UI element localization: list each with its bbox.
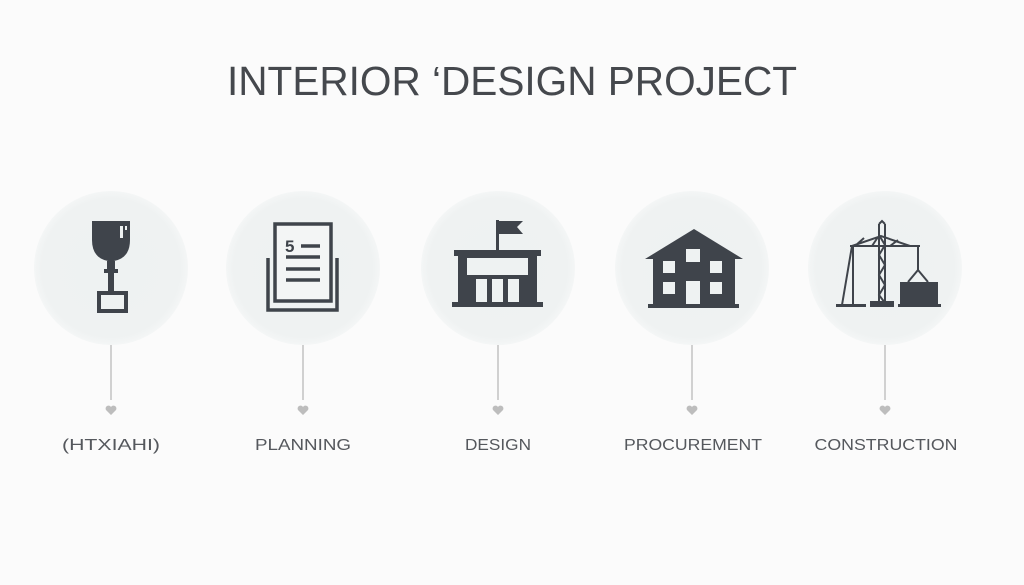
step 4: procurement xyxy=(615,191,769,454)
label 5: CONSTRUCTION xyxy=(814,437,958,454)
title: INTERIOR ‘DESIGN PROJECT xyxy=(227,58,797,104)
step 5: construction xyxy=(808,191,962,454)
step 2: planning: 5 xyxy=(285,237,294,256)
icon: house xyxy=(645,229,743,308)
label 1: (HTXIAHI) xyxy=(62,437,160,454)
label 4: PROCUREMENT xyxy=(624,437,762,454)
icon: crane xyxy=(842,221,928,305)
label 3: DESIGN xyxy=(465,437,531,454)
icon: document xyxy=(268,224,337,310)
icon: trophy xyxy=(92,221,130,311)
label 2: PLANNING xyxy=(255,437,351,454)
step 2: planning xyxy=(226,191,380,454)
step 3: design xyxy=(421,191,575,454)
icon: building with flag xyxy=(452,220,543,307)
step 1: trophy xyxy=(34,191,188,454)
